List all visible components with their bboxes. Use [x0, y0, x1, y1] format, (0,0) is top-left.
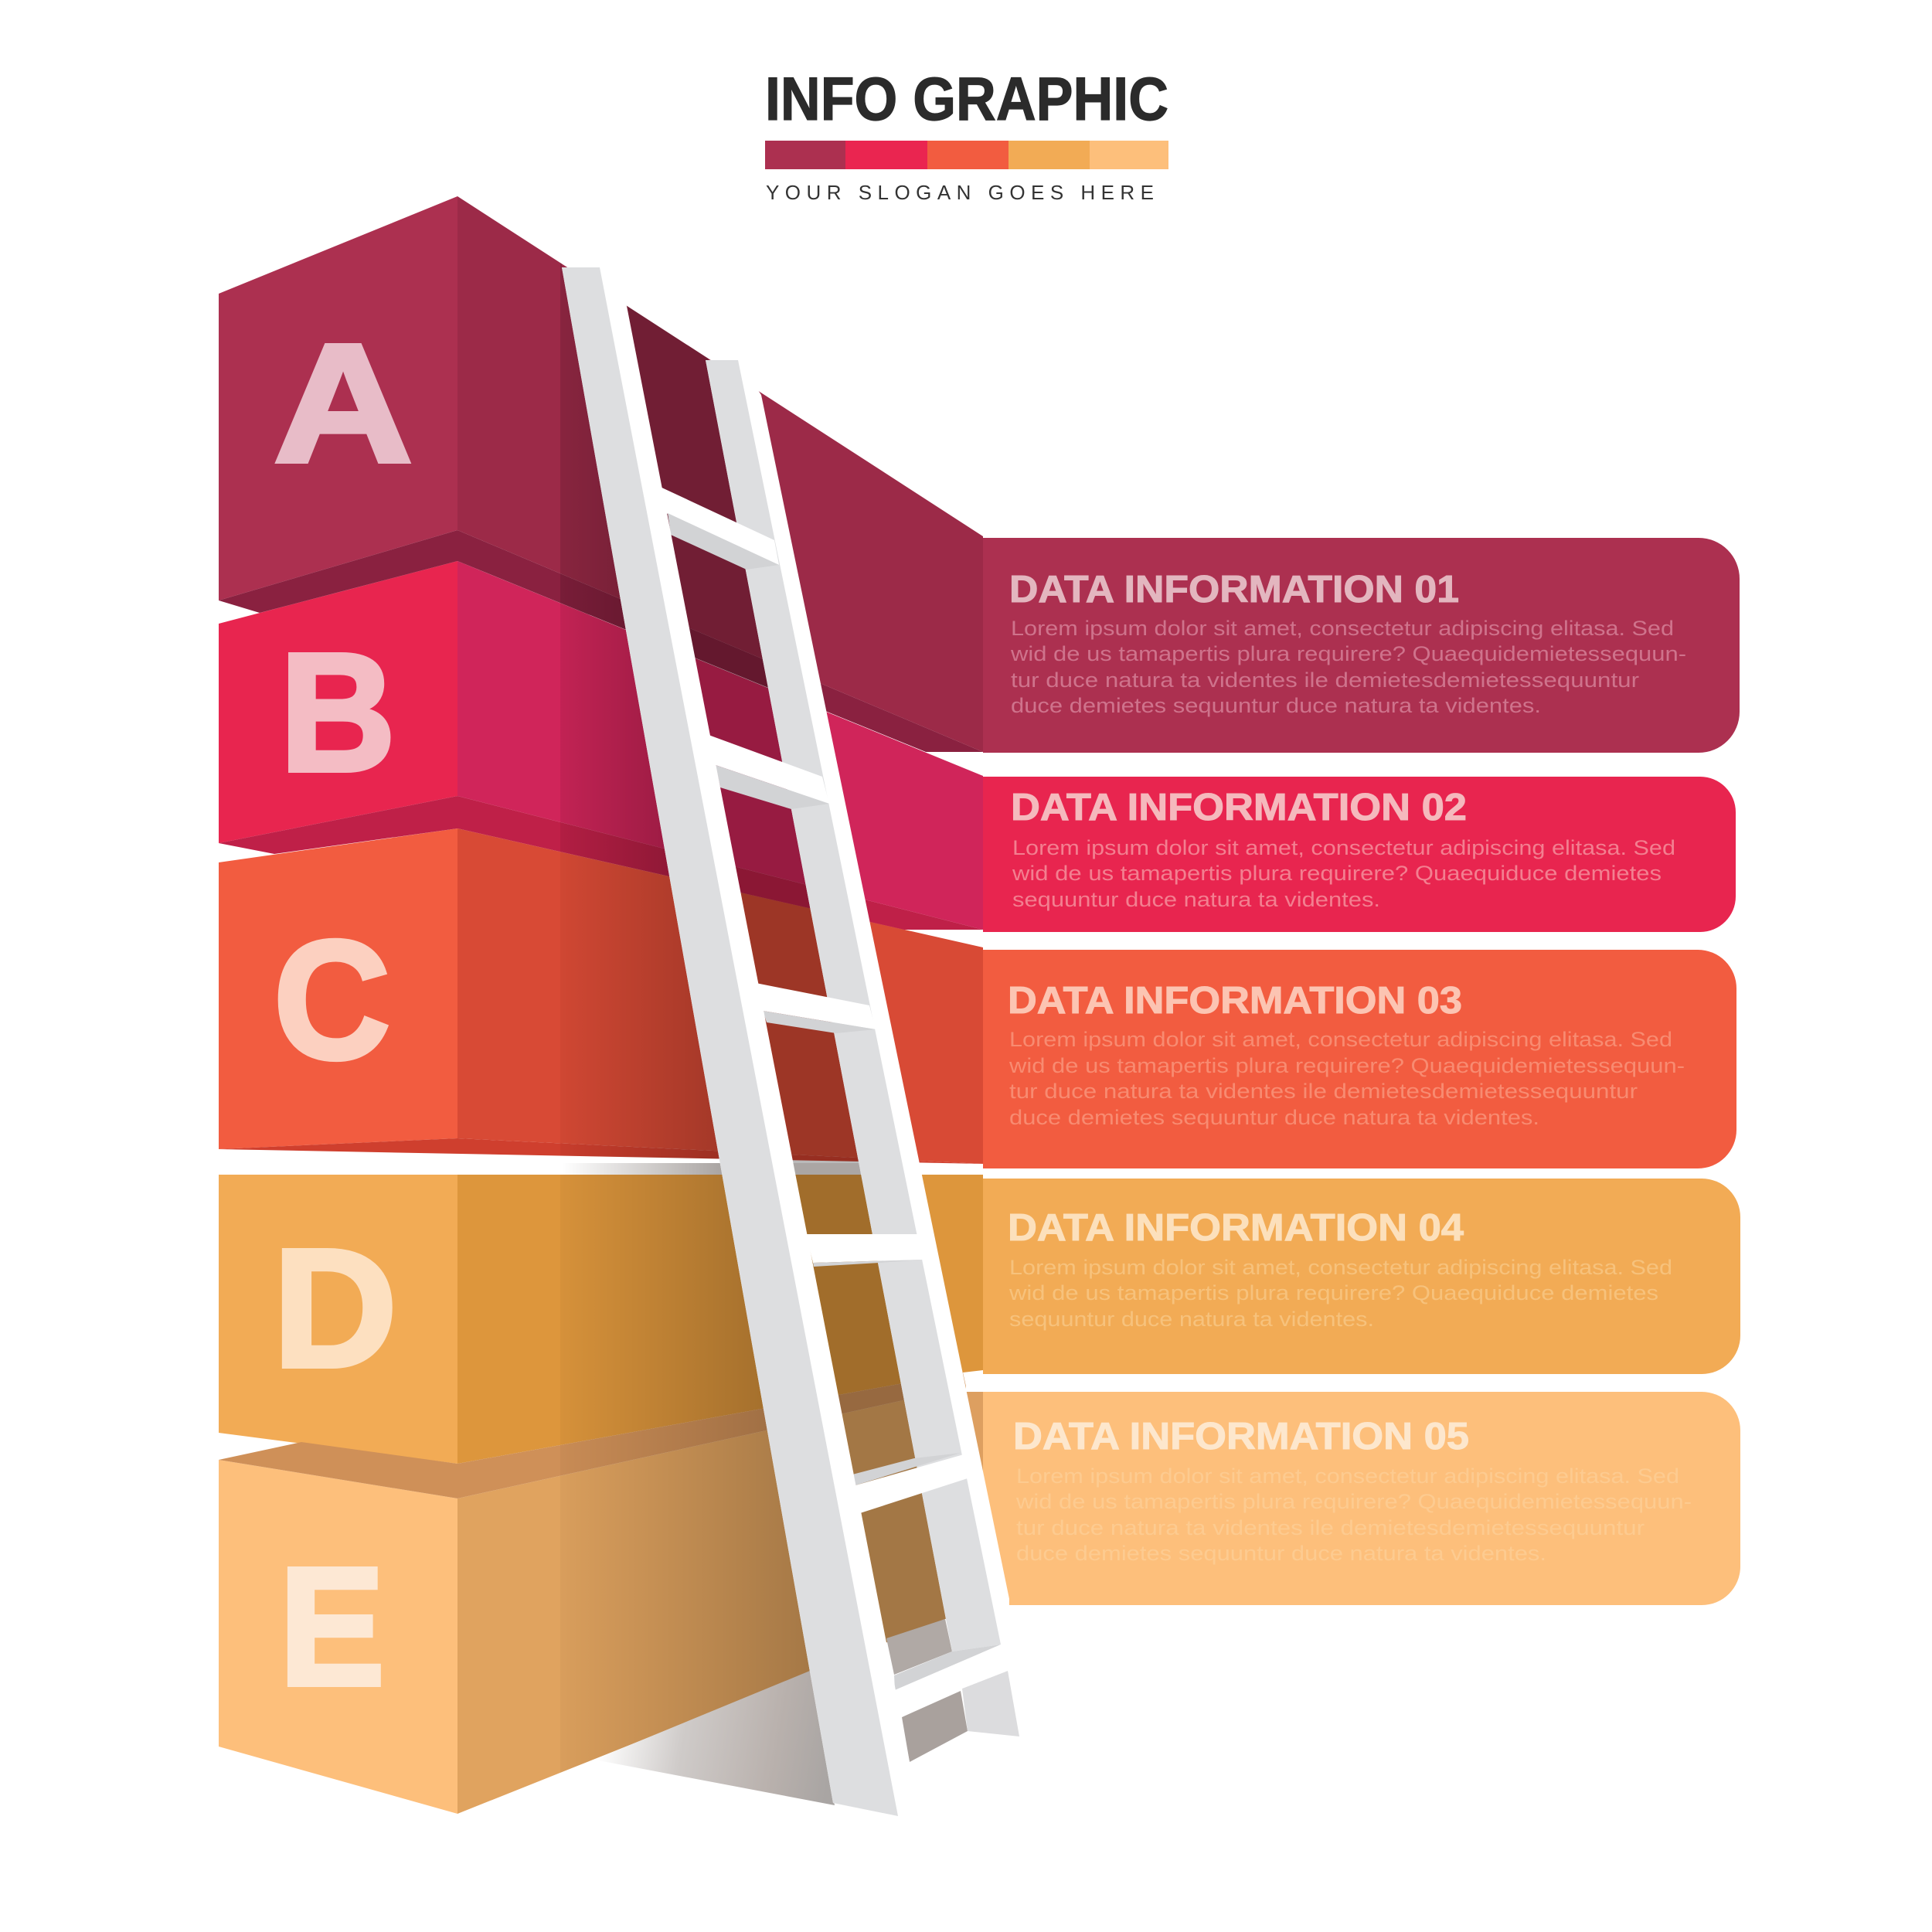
- info panels: [966, 538, 1740, 1605]
- block E: [219, 1386, 966, 1814]
- letter A: A: [274, 310, 413, 498]
- panel: data information 04: [983, 1179, 1740, 1374]
- panel: data information 03: Lorem ipsum dolor sit amet, consectetur adipiscing elitasa. Sed: [1009, 1028, 1672, 1051]
- panel: data information 02: [983, 777, 1736, 932]
- block D: [219, 1175, 983, 1498]
- ladder: [562, 267, 1019, 1816]
- panel: data information 01: Lorem ipsum dolor sit amet, consectetur adipiscing elitasa. Sed: [1011, 617, 1674, 640]
- panel: data information 05: wid de us tamapertis plura requirere? Quaequidemietessequun-: [1015, 1490, 1692, 1513]
- block C: [219, 828, 983, 1164]
- panel: data information 05: [966, 1392, 1740, 1605]
- panel: data information 04: wid de us tamapertis plura requirere? Quaequiduce demietes: [1009, 1281, 1658, 1304]
- letter B: B: [280, 619, 396, 807]
- letter C: C: [274, 906, 390, 1094]
- letter E: E: [279, 1533, 385, 1721]
- block shading beside ladder: [560, 263, 810, 1770]
- panel: data information 04: sequuntur duce natura ta videntes.: [1009, 1308, 1374, 1331]
- panel: data information 05: Lorem ipsum dolor sit amet, consectetur adipiscing elitasa. Sed: [1016, 1464, 1679, 1488]
- panel: data information 05: duce demietes sequuntur duce natura ta videntes.: [1016, 1542, 1546, 1565]
- block A: [219, 196, 983, 752]
- panel: data information 01: duce demietes sequuntur duce natura ta videntes.: [1011, 694, 1541, 717]
- panel: data information 01: [983, 538, 1740, 753]
- right rail: [706, 360, 1019, 1736]
- panel: data information 02: DATA INFORMATION 02: [1011, 787, 1467, 828]
- colour bar: [765, 141, 1168, 169]
- block shading between ladder rails: [627, 306, 946, 1643]
- floor shadow: [594, 1619, 968, 1805]
- panel: data information 05: DATA INFORMATION 05: [1013, 1416, 1469, 1458]
- panel: data information 01: wid de us tamapertis plura requirere? Quaequidemietessequun-: [1010, 642, 1686, 665]
- shadow between C and D: [562, 1163, 871, 1175]
- block B: [219, 561, 983, 930]
- panel: data information 04: Lorem ipsum dolor sit amet, consectetur adipiscing elitasa. Sed: [1009, 1256, 1672, 1279]
- title: INFO GRAPHIC: [765, 64, 1168, 133]
- letter D: D: [273, 1215, 397, 1403]
- panel: data information 03: duce demietes sequuntur duce natura ta videntes.: [1009, 1106, 1539, 1129]
- panel: data information 02: Lorem ipsum dolor sit amet, consectetur adipiscing elitasa. Sed: [1012, 836, 1675, 859]
- panel: data information 03: wid de us tamapertis plura requirere? Quaequidemietessequun-: [1009, 1054, 1685, 1077]
- left rail: [562, 267, 910, 1816]
- panel: data information 04: DATA INFORMATION 04: [1008, 1207, 1464, 1249]
- panel: data information 03: [983, 950, 1736, 1168]
- panel: data information 02: sequuntur duce natura ta videntes.: [1012, 888, 1380, 911]
- slogan: YOUR SLOGAN GOES HERE: [766, 181, 1154, 204]
- panel: data information 01: tur duce natura ta videntes ile demietesdemietessequuntur: [1011, 668, 1639, 692]
- panel: data information 05: tur duce natura ta videntes ile demietesdemietessequuntur: [1016, 1516, 1645, 1539]
- panel: data information 03: DATA INFORMATION 03: [1008, 980, 1462, 1022]
- panel: data information 01: DATA INFORMATION 01: [1009, 569, 1459, 611]
- panel: data information 03: tur duce natura ta videntes ile demietesdemietessequuntur: [1009, 1080, 1638, 1103]
- panel: data information 02: wid de us tamapertis plura requirere? Quaequiduce demietes: [1012, 862, 1662, 885]
- rungs: [657, 485, 1008, 1717]
